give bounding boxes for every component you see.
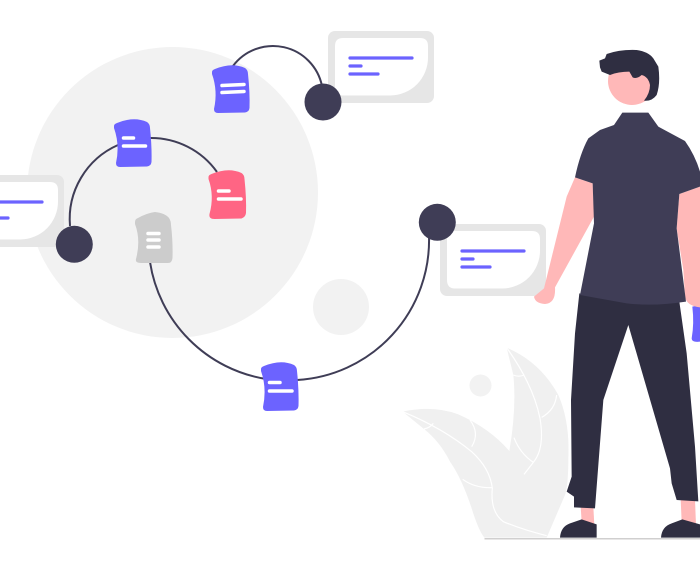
document: blue left <box>114 119 152 167</box>
document: grey <box>135 212 173 263</box>
node: right <box>419 204 456 241</box>
head and hair <box>599 50 659 105</box>
background circle: small <box>470 374 492 396</box>
card: left <box>0 175 64 247</box>
card: top <box>328 31 434 103</box>
connector arc: bottom right <box>297 236 429 380</box>
card: right <box>440 224 546 296</box>
held document <box>692 305 700 342</box>
connector arc: top <box>233 46 322 86</box>
arms and shirt <box>534 113 700 307</box>
legs and feet <box>560 293 700 538</box>
background circle: medium <box>313 279 369 335</box>
document: blue top <box>212 65 250 113</box>
connector arc: middle <box>150 138 217 172</box>
document: pink <box>208 170 246 219</box>
background circle: large <box>27 47 318 338</box>
node: left <box>56 226 93 263</box>
person <box>534 50 700 538</box>
connector arc: bottom <box>150 262 266 379</box>
plant <box>403 348 569 538</box>
connector arc: left <box>70 145 118 226</box>
node: top <box>304 84 342 120</box>
ground line <box>484 538 700 540</box>
document: blue bottom <box>261 362 299 411</box>
